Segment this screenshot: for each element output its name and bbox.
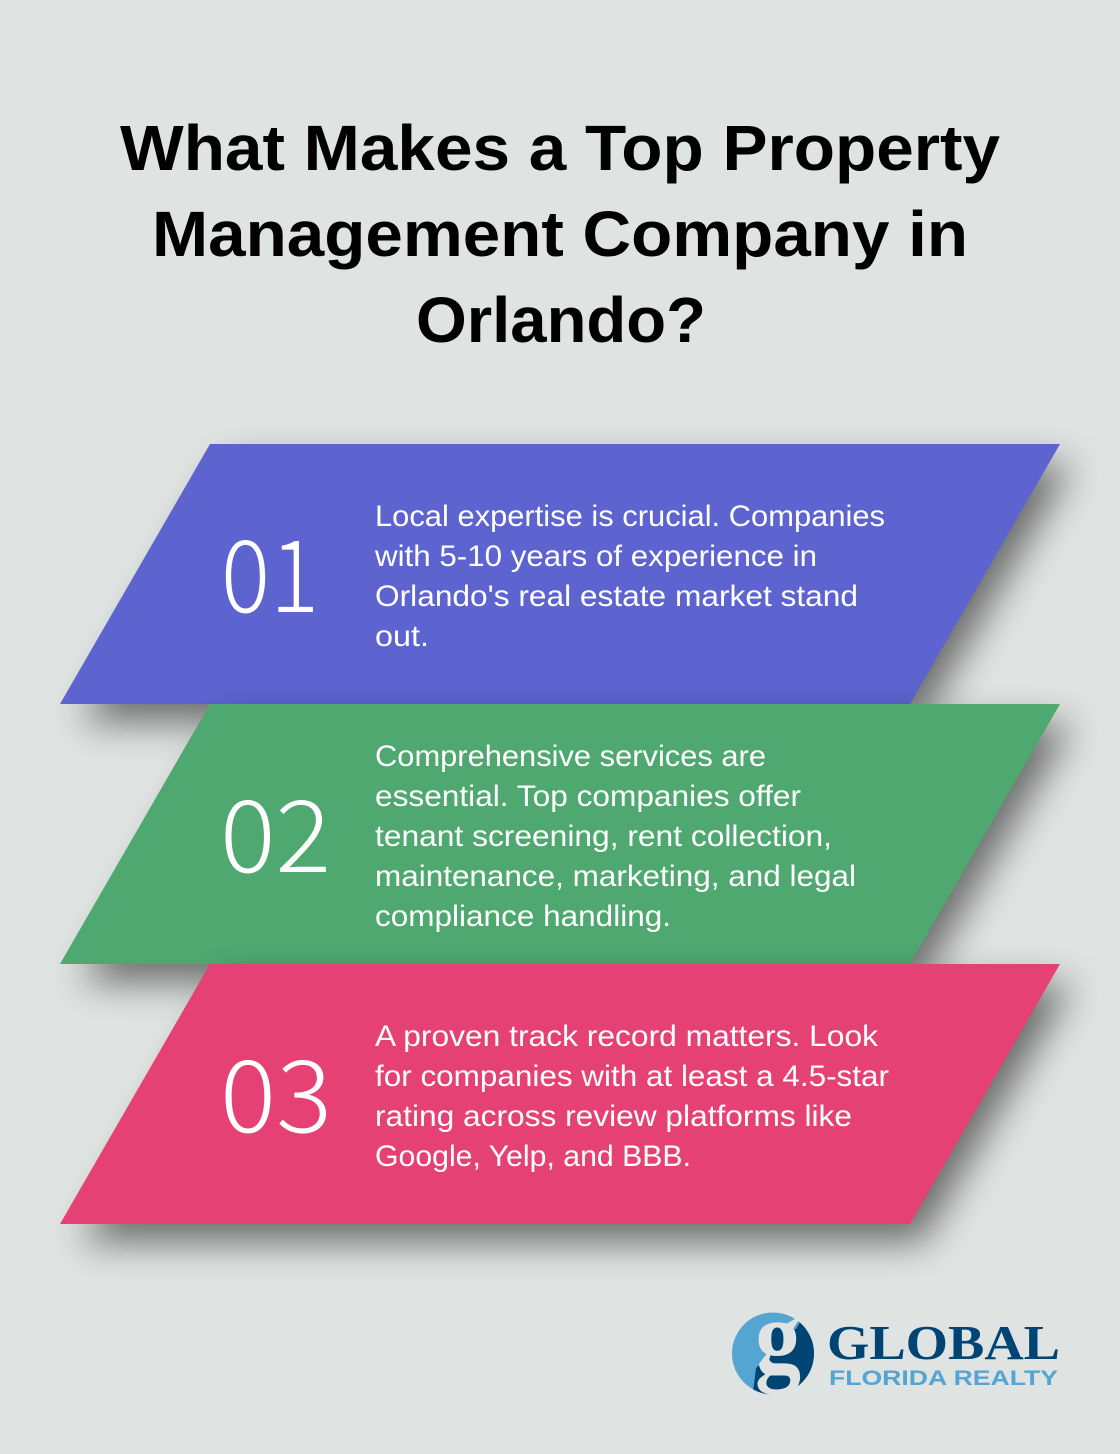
text: step 02 description: maintenance, marketing, and legal [375, 860, 856, 893]
panel: step 01 local expertise [60, 444, 1072, 722]
text: step 01 description: Local expertise is crucial. Companies [375, 500, 885, 533]
logo: Global Florida Realty [732, 1312, 1058, 1394]
number 02: 02 [220, 756, 331, 901]
text: step 02 description: essential. Top companies offer [375, 780, 801, 813]
wordmark: GLOBAL: GLOBAL [827, 1315, 1060, 1370]
title [120, 112, 1000, 356]
panel: step 02 comprehensive services [60, 704, 1072, 982]
text: step 03 description: for companies with at least a 4.5-star [375, 1060, 889, 1093]
icon: g in circle: g [755, 1278, 801, 1395]
text: step 02 description: tenant screening, rent collection, [375, 820, 832, 853]
text: step 01 description: out. [375, 620, 429, 653]
title: What Makes a Top Property [120, 112, 1000, 184]
text: step 03 description: rating across review platforms like [375, 1100, 852, 1133]
text: step 01 description [374, 500, 885, 653]
title: Management Company in [152, 198, 968, 270]
panel: step 03 proven track record [60, 964, 1072, 1242]
icon: g in circle [732, 1312, 814, 1394]
text: step 02 description [375, 740, 856, 933]
text: step 03 description [375, 1020, 889, 1173]
wordmark: FLORIDA REALTY: FLORIDA REALTY [829, 1367, 1058, 1390]
text: step 02 description: Comprehensive services are [375, 740, 766, 773]
number 03: 03 [220, 1016, 332, 1161]
text: step 03 description: A proven track record matters. Look [375, 1020, 878, 1053]
text: step 01 description: Orlando's real estate market stand [375, 580, 858, 613]
text: step 02 description: compliance handling. [375, 900, 671, 933]
title: Orlando? [416, 284, 706, 356]
text: step 01 description: with 5-10 years of experience in [374, 540, 817, 573]
text: step 03 description: Google, Yelp, and BBB. [375, 1140, 691, 1173]
number 01: 01 [221, 496, 319, 641]
